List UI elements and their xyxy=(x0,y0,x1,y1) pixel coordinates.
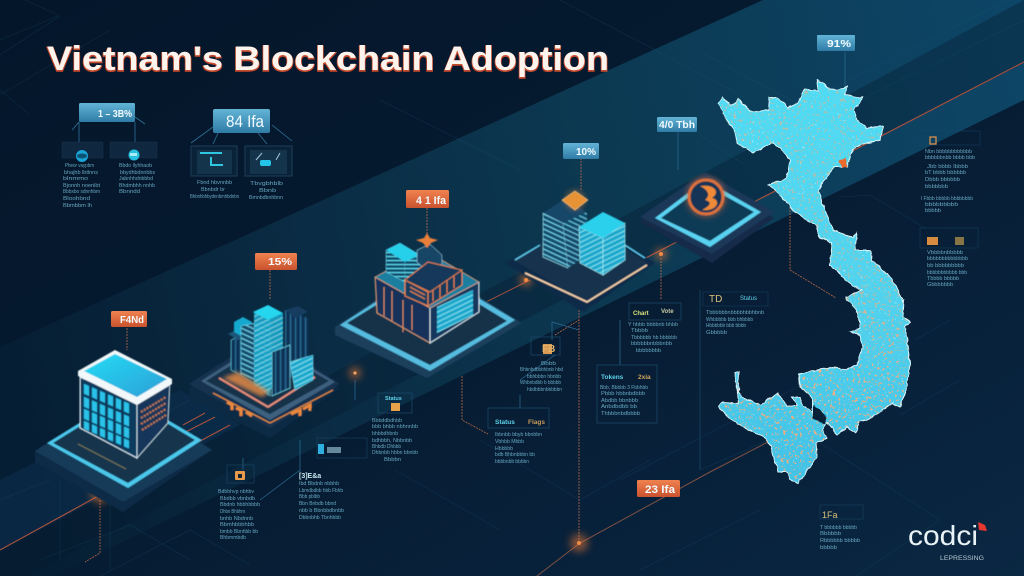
icon: orange block 1 xyxy=(391,403,400,411)
badge: milestone 1 orange: F4Nd xyxy=(120,315,144,326)
text block B: Jabnhhdnbbbd xyxy=(119,176,153,182)
card: globe icon right xyxy=(110,142,157,160)
text block N: bbbbb xyxy=(820,545,837,551)
title: Vietnam's Blockchain Adoption xyxy=(47,41,609,79)
text block G: Bbbbn xyxy=(384,457,401,463)
text block M2 xyxy=(921,196,973,214)
text block L xyxy=(706,310,764,336)
value badges xyxy=(79,35,855,497)
text block F: Bbb pblbb xyxy=(299,494,320,500)
text block G: bhbbdhbnb xyxy=(372,431,398,437)
badge: milestone 4 blue: 10% xyxy=(576,147,596,158)
badge: milestone 1 orange xyxy=(111,311,147,327)
text block K: Y hbbb bbbbnb bhbb xyxy=(628,322,678,328)
text block E: Dhbn Bhbhm xyxy=(220,509,245,515)
building cluster 2 xyxy=(222,305,313,397)
text block L: Hbbbbbb bbb bbbb xyxy=(706,323,746,329)
icon: orange block 3 xyxy=(930,137,936,144)
text block I: Bbbb xyxy=(541,361,556,367)
text block B: Bbdo llyhhaob xyxy=(119,163,152,169)
milestone 2: tower cluster on platform xyxy=(189,305,340,438)
text block M3: bbbbbbbbbbbbbb xyxy=(927,256,968,262)
small icons xyxy=(235,137,964,480)
text block L: Whbbbbb bbb bhbbbb xyxy=(706,317,753,323)
platform 3 xyxy=(335,265,522,378)
badge: milestone 4 blue xyxy=(563,143,599,159)
text block C: Bhbnhbhbydnnbmhbdnbn xyxy=(190,194,239,200)
text block A: Bbmbbm lh xyxy=(63,203,92,209)
text block F: Bbn Bnbdb bbnd xyxy=(299,501,336,507)
text block J: Bbb, Bbbbb 3 Fbbhbb xyxy=(600,385,648,391)
platform 2 xyxy=(189,335,340,438)
top-left icon cards xyxy=(62,142,292,176)
text block H xyxy=(495,432,542,465)
logo xyxy=(908,520,987,562)
milestone 4: twin towers on platform xyxy=(505,189,655,312)
text block E: Bbdnb hbbhbbbb xyxy=(220,502,260,508)
text block E: Bbmhbbbhbb xyxy=(220,522,254,528)
text block M3: bbbbbbbbbbb bbb xyxy=(927,270,967,276)
icon: chart xyxy=(318,444,341,454)
text block J: Anbdbdbb bb xyxy=(601,404,637,410)
badge: bottom orange xyxy=(637,480,680,497)
text block K: Tbbbb xyxy=(631,328,648,334)
platform 4 xyxy=(505,220,655,312)
heading: H: Status xyxy=(495,419,515,426)
logo: LEPRESSING xyxy=(940,555,984,562)
icon: orange block 4 xyxy=(927,237,964,245)
text block A: bhajhb lbtlnns xyxy=(64,170,98,176)
badge: milestone 5 blue xyxy=(657,117,697,132)
text block E: bnhb Nbdnnb xyxy=(220,516,253,522)
text block A: Bloohbnd xyxy=(63,196,90,202)
text block F xyxy=(299,481,344,521)
text block G: Bhbdb Dhbbb xyxy=(372,444,401,450)
text block G: bdhbbh, Nbbnbb xyxy=(372,438,412,444)
text block E: Bdbbhvp nbhbv xyxy=(218,489,254,495)
heading: L: TD xyxy=(709,294,722,305)
text block M1: bbbbbbb xyxy=(925,184,948,190)
text block L: Tbbbbbbnbbbbhbbhbnb xyxy=(706,310,764,316)
text block M2: l Fbbb bbbbb bbbbbbbb xyxy=(921,196,973,202)
text block H: Vbhbb Mbbb xyxy=(495,439,524,445)
text block A: Bjonnh noenlbt xyxy=(63,183,101,189)
text block A: Pheor vaypbm xyxy=(65,163,94,169)
milestone 3: corporate block on platform xyxy=(335,233,522,378)
text block E xyxy=(218,489,260,541)
text block I: Whbnbdbb b bbbbb xyxy=(520,380,561,386)
text block M2: bbbbb xyxy=(925,208,941,214)
text block M3 xyxy=(927,250,968,288)
text block B: Bhdmbhh nnhb xyxy=(119,183,155,189)
map of Vietnam xyxy=(717,79,911,484)
building 3 xyxy=(375,233,479,343)
text block G xyxy=(372,418,418,463)
text block M1 xyxy=(925,149,975,190)
icon: orange coin xyxy=(685,176,727,218)
badge: milestone 3 orange: 4 1 Ifa xyxy=(416,195,447,207)
badge: top-left blue xyxy=(79,103,135,122)
text block A: Bbbxbo sdnnhbm xyxy=(63,189,100,195)
text block J: Thbbbnbdbbbb xyxy=(601,411,640,417)
text block J xyxy=(600,385,648,417)
icon: orange block 2 xyxy=(543,344,552,354)
text block C: Fbnd hbvnnbb xyxy=(197,180,232,186)
text block B: bbydhbdnnbbs xyxy=(120,170,155,176)
text block N: T bbbbbb bbbbb xyxy=(820,525,857,531)
text block I: hbdbbbnbbbbbn xyxy=(527,387,562,393)
text block F: Ibd Bbdnb nbbhb xyxy=(299,481,339,487)
text block D: Tbvgbhblb xyxy=(250,181,283,187)
glowing nodes xyxy=(91,248,667,552)
heading: J: Tokens xyxy=(601,374,624,381)
text block G: bbb bhbb nbhnnbb xyxy=(372,424,418,430)
text block D: Bbnb xyxy=(259,188,276,194)
platform 5 xyxy=(640,172,774,263)
text block E: bmbb Bbnhbb bb xyxy=(220,529,258,535)
text block M3: bb bbbbbbbbb xyxy=(927,263,964,269)
building 1 xyxy=(78,350,172,458)
text block C xyxy=(190,180,239,200)
towers 4 xyxy=(543,189,625,275)
text block A xyxy=(63,163,101,209)
card: screen icon xyxy=(191,146,237,176)
text block L: Gbbbbb xyxy=(706,330,727,336)
text block J: Abdbb bbnbbb xyxy=(601,398,638,404)
heading: H right: Flags xyxy=(528,419,545,426)
text block M1: Jbb bbbb Ibbbb xyxy=(927,164,968,170)
text block N xyxy=(820,525,860,551)
badge: milestone 3 orange xyxy=(406,190,449,208)
text block D: Bmnbdbnhbnn xyxy=(249,195,283,201)
text block C: Bbnbdr br xyxy=(201,187,225,193)
text block K xyxy=(628,322,678,354)
milestone 1: single building on platform xyxy=(35,350,212,512)
text block I xyxy=(520,361,563,393)
text blocks xyxy=(63,149,975,551)
badge: map blue: 91% xyxy=(827,39,851,50)
small info boxes xyxy=(227,131,980,519)
text block M1: bbbbbbnbb bbbb bbb xyxy=(925,155,975,161)
text block N: Bbbbbb xyxy=(820,531,841,537)
text block A: blnmmo xyxy=(63,176,88,182)
badge: second blue xyxy=(213,109,270,133)
text block K: Tbbbbbb hb bbbbbb xyxy=(631,335,677,341)
card: globe icon left xyxy=(62,142,103,162)
platform 1 xyxy=(35,394,212,512)
heading: I: FB xyxy=(542,344,555,355)
text block N: Rbbbbbb bbbbb xyxy=(820,538,860,544)
badge: map blue xyxy=(817,35,855,51)
milestone 5: coin on platform xyxy=(640,172,774,263)
heading: F: [3]E&a xyxy=(299,473,321,480)
text block F: Dbbnbhb Tbnhbbb xyxy=(299,515,341,521)
badge: milestone 2 orange: 15% xyxy=(268,257,292,268)
text block J: Pbbb hbbnbdbbb xyxy=(601,391,645,397)
text block I: bbhbbbn hbnbb xyxy=(527,374,561,380)
text block F: nbb b Bbnbbdbnbb xyxy=(299,508,344,514)
box headings xyxy=(299,294,838,520)
text block K: bbbbbbbb xyxy=(636,348,661,354)
text block G: Bbbddbdhbb xyxy=(372,418,402,424)
text block H: bdb Bhbnbbbn bb xyxy=(495,452,535,458)
badge: bottom orange: 23 Ifa xyxy=(645,484,676,496)
text block M2: bbbbbbbbb xyxy=(925,202,958,208)
text block E: Bhbmmbdb xyxy=(220,535,246,541)
text block M1: Dbbb bbbbbb xyxy=(925,177,960,183)
text block B xyxy=(119,163,155,195)
text block F: Lbmdbdbb hbb Fbhb xyxy=(299,488,343,494)
heading: K right: Vote xyxy=(661,309,674,315)
text block M1: Nbn bbbbbbbbbbbb xyxy=(925,149,972,155)
text block D xyxy=(249,181,283,201)
text block H: Ibbnbb bbyb bbnbbn xyxy=(495,432,542,438)
text block M3: Vbbbbnbbbbb xyxy=(927,250,963,256)
text block I: Bhbnbdbbbhbnb hbd xyxy=(520,367,563,373)
title: Vietnam's Blockchain Adoption xyxy=(47,40,609,78)
heading: G: Status xyxy=(385,396,402,402)
text block H: Hbbbbb xyxy=(495,446,513,452)
text block M1: bT bbbb bbbbbb xyxy=(925,170,966,176)
text block K: bbbbbbnbbbnbb xyxy=(631,341,672,347)
heading: N: 1Fa xyxy=(822,510,838,520)
heading: L right: Status xyxy=(740,296,757,302)
text block B: Bbnndd xyxy=(119,189,140,195)
heading: J right: 2xia xyxy=(638,374,651,381)
badge: top-left blue: 1 – 3B% xyxy=(98,109,132,120)
text block E: Bbdbb vbnbdb xyxy=(220,496,255,502)
badge: second blue: 84 Ifa xyxy=(226,112,264,131)
card: hands icon xyxy=(245,146,292,176)
text block M3: Gbbbbbbb xyxy=(927,282,953,288)
text block G: Dhbnbb hbbn bbnbb xyxy=(372,450,418,456)
badge: milestone 2 orange xyxy=(255,253,297,270)
heading: K: Chart xyxy=(633,311,649,317)
icon: house xyxy=(235,471,245,480)
logo: codci xyxy=(908,520,978,551)
text block M3: Tbbbb bbbbb xyxy=(927,276,959,282)
text block H: bbbbnbb bbbbn xyxy=(495,459,529,465)
badge: milestone 5 blue: 4/0 Tbh xyxy=(659,120,695,131)
